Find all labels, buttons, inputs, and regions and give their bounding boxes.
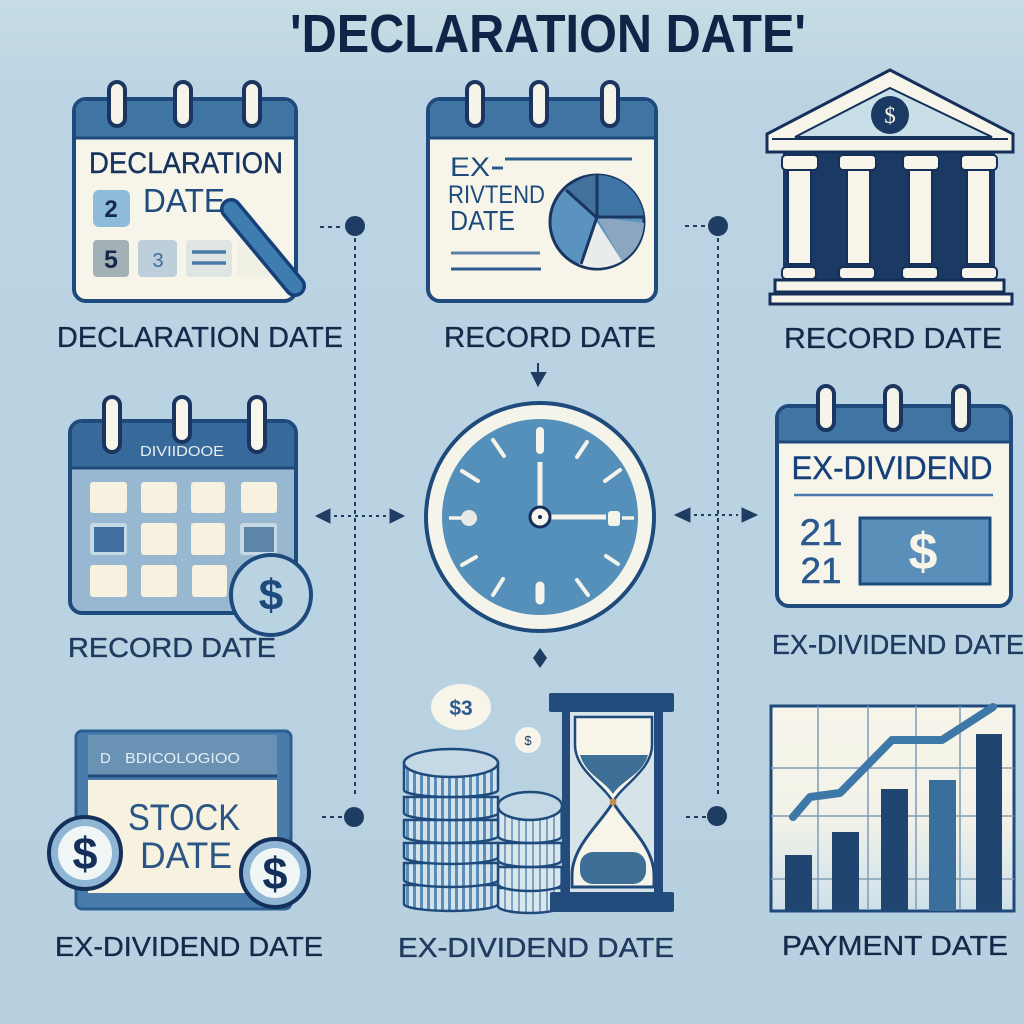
title: 'DECLARATION DATE' <box>290 4 806 64</box>
icon: stock date calendar with coins: DATE <box>140 835 232 876</box>
icon: small floating coins: $3 <box>449 697 473 720</box>
icon: ex-dividend calendar with banknote: EX-DIVIDEND <box>792 450 992 486</box>
icon: ex-dividend calendar with banknote: $ <box>909 523 938 581</box>
icon: declaration date calendar: 2 <box>104 196 118 223</box>
icon: clock <box>426 403 654 631</box>
icon: hourglass <box>549 693 674 912</box>
icon: bank building <box>767 70 1013 304</box>
arrow: left double-headed dashed <box>316 509 404 523</box>
icon: record date grid calendar: $ <box>259 571 283 620</box>
icon: declaration date calendar: DECLARATION <box>89 147 283 180</box>
icon: ex-dividend calendar with banknote: 21 <box>800 512 842 553</box>
connector: left dashed timeline <box>320 216 365 827</box>
icon: declaration date calendar <box>74 82 296 301</box>
label: record date (top centre): RECORD DATE <box>444 322 656 354</box>
icon: record date grid calendar <box>70 397 311 635</box>
icon: record date calendar with pie chart <box>428 82 656 301</box>
label: record date (middle left): RECORD DATE <box>68 632 276 663</box>
icon: stock date calendar with coins: $ <box>262 848 288 899</box>
icon: stock date calendar with coins: D <box>100 750 111 767</box>
label: payment date: PAYMENT DATE <box>782 930 1008 961</box>
label: ex-dividend date (bottom centre): EX-DIVIDEND DATE <box>398 932 674 963</box>
icon: ex-dividend calendar with banknote: 21 <box>800 550 842 591</box>
label: ex-dividend date (bottom left): EX-DIVIDEND DATE <box>55 931 323 962</box>
icon: small floating coins: $ <box>524 733 532 748</box>
icon: declaration date calendar: 3 <box>152 250 164 272</box>
icon: coin stacks <box>404 749 562 913</box>
icon: record date calendar with pie chart: RIVTEND <box>448 181 545 209</box>
label: record date (top right): RECORD DATE <box>784 323 1002 355</box>
label: declaration date: DECLARATION DATE <box>57 322 343 354</box>
chart: rising bars and line <box>771 706 1014 911</box>
arrow: right double-headed dashed <box>675 508 757 522</box>
icon: stock date calendar with coins: $ <box>72 828 98 879</box>
icon: stock date calendar with coins <box>49 731 309 909</box>
icon: small floating coins <box>431 684 541 753</box>
icon: small down arrow <box>532 363 545 385</box>
icon: record date grid calendar: DIVIIDOOE <box>140 443 224 460</box>
icon: declaration date calendar: 5 <box>104 246 118 274</box>
icon: small diamond <box>533 648 547 668</box>
icon: bank building: $ <box>884 103 896 128</box>
icon: stock date calendar with coins: BDICOLOGIOO <box>125 750 240 767</box>
icon: record date calendar with pie chart: EX <box>450 152 490 182</box>
icon: declaration date calendar: DATE <box>143 182 225 219</box>
icon: record date calendar with pie chart: DATE <box>450 205 515 236</box>
connector: right dashed timeline <box>685 216 728 826</box>
icon: stock date calendar with coins: STOCK <box>128 797 240 838</box>
icon: ex-dividend calendar with banknote <box>777 386 1011 606</box>
